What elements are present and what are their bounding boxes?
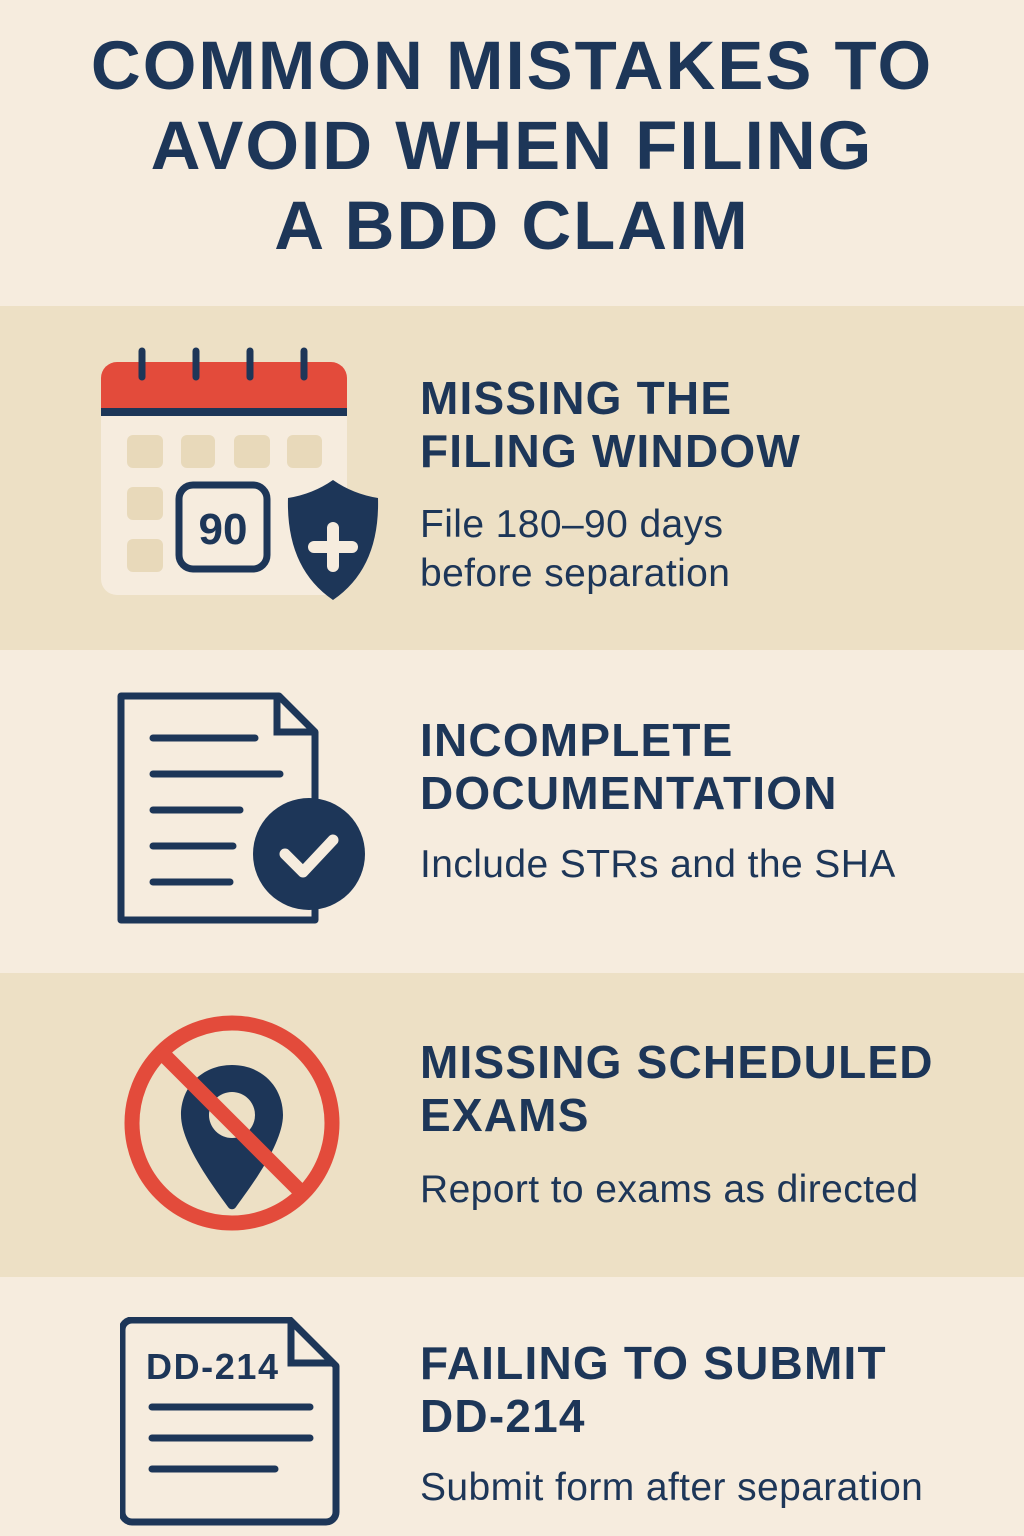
body text: Submit form after separation: [420, 1466, 923, 1509]
heading: MISSING THE: [420, 372, 732, 424]
heading: FILING WINDOW: [420, 425, 801, 477]
panel: exams: [0, 973, 1024, 1277]
icon: calendar with shield: [101, 348, 378, 600]
icon: DD-214 form: DD-214: [146, 1346, 278, 1387]
icon: document with check: [118, 692, 365, 924]
heading: [420, 714, 838, 819]
panel: DD-214: [0, 1277, 1024, 1536]
icon: calendar with shield: 90: [199, 505, 247, 554]
heading: [420, 372, 801, 477]
title: COMMON MISTAKES TO: [91, 27, 933, 104]
body text: Include STRs and the SHA: [420, 843, 896, 886]
icon: prohibited location pin: [124, 1016, 340, 1230]
heading: [420, 1036, 934, 1141]
panel: documentation: [0, 650, 1024, 973]
heading: FAILING TO SUBMIT: [420, 1337, 887, 1389]
panel: filing window: [0, 306, 1024, 650]
heading: [420, 1337, 887, 1442]
body text: before separation: [420, 552, 730, 595]
heading: EXAMS: [420, 1089, 590, 1141]
icon: DD-214 form: [120, 1317, 340, 1526]
title: A BDD CLAIM: [274, 187, 750, 264]
heading: DOCUMENTATION: [420, 767, 838, 819]
body text: [420, 503, 730, 595]
title: AVOID WHEN FILING: [151, 107, 873, 184]
body text: File 180–90 days: [420, 503, 723, 546]
heading: MISSING SCHEDULED: [420, 1036, 934, 1088]
heading: DD-214: [420, 1390, 586, 1442]
body text: Report to exams as directed: [420, 1168, 919, 1211]
heading: INCOMPLETE: [420, 714, 734, 766]
title: [91, 27, 933, 264]
